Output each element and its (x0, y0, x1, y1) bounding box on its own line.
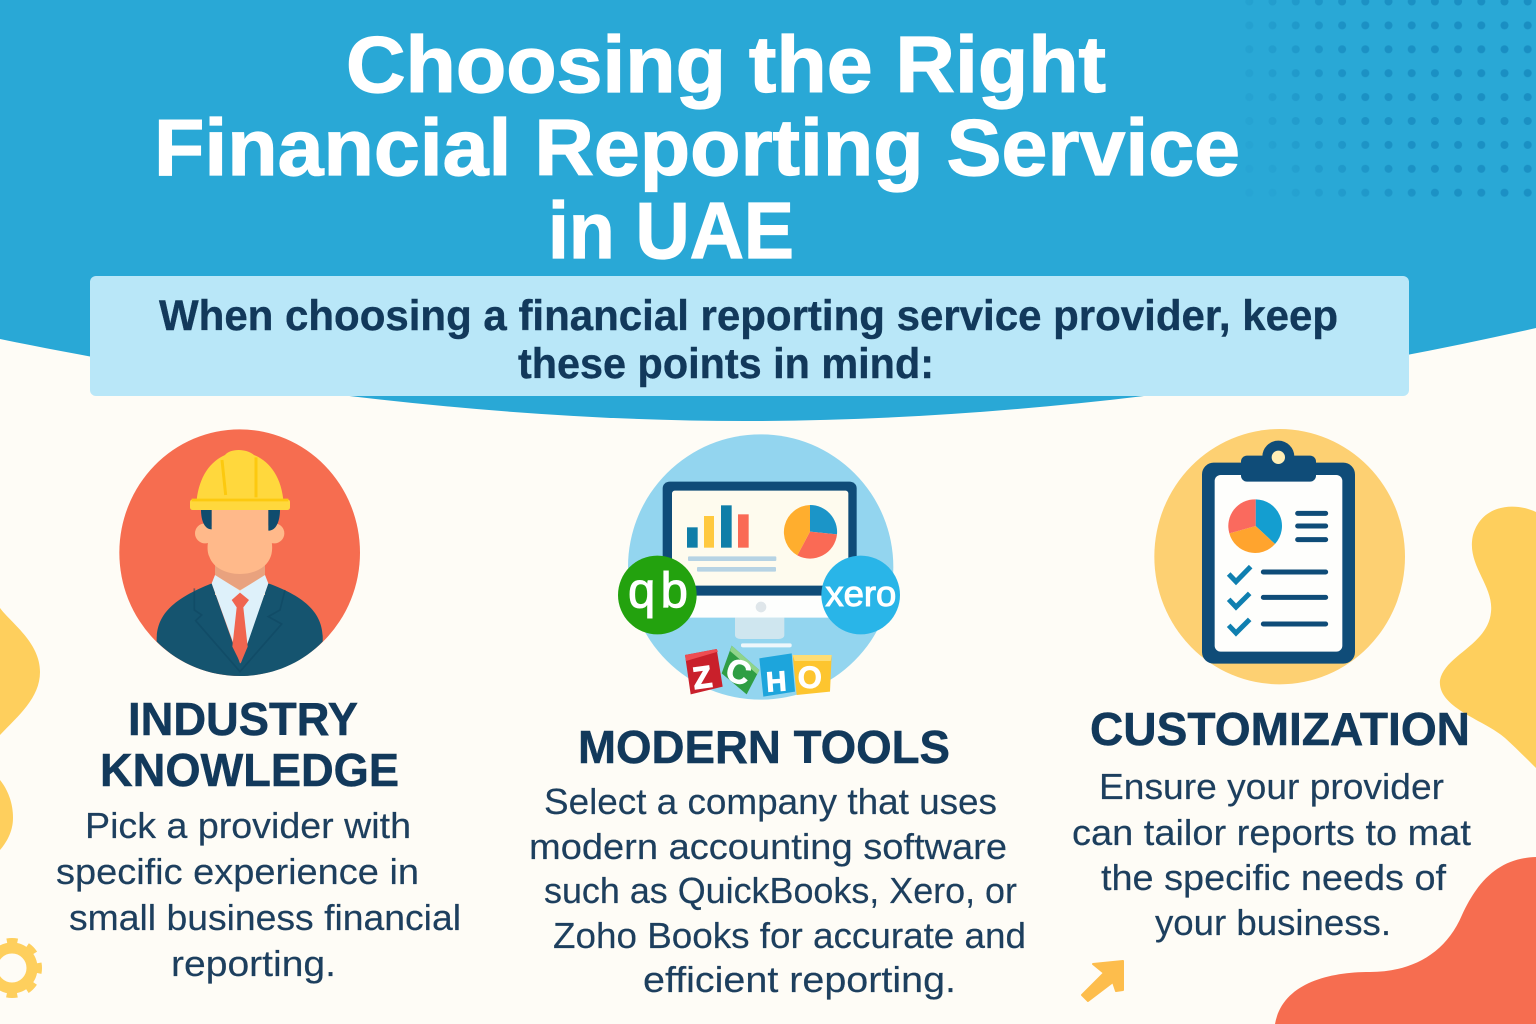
icon: zoho logo: H (765, 665, 787, 698)
body text: Ensure your provider (1099, 766, 1444, 807)
icon: zoho logo (685, 646, 832, 698)
decorative coral blob bottom right (1275, 857, 1536, 1024)
icon: xero logo: xero (825, 573, 896, 614)
panel: industry knowledge (56, 429, 461, 984)
panel: customization (1072, 429, 1471, 943)
body text: the specific needs of (1101, 857, 1447, 898)
body text: can tailor reports to mat (1072, 812, 1471, 853)
icon: zoho logo: Z (691, 660, 714, 696)
body text: efficient reporting. (643, 959, 956, 1000)
heading: CUSTOMIZATION (1090, 703, 1470, 755)
title: Financial Reporting Service (154, 103, 1240, 192)
body text: such as QuickBooks, Xero, or (544, 870, 1017, 911)
header blue curved band (0, 0, 1536, 421)
body text: Zoho Books for accurate and (553, 915, 1026, 956)
icon: zoho logo: O (798, 660, 822, 695)
icon: clipboard checklist (1154, 429, 1405, 684)
panel: modern tools (529, 434, 1026, 1000)
heading (100, 693, 399, 796)
icon: gear (0, 940, 40, 996)
body text (529, 781, 1026, 1000)
body text: small business financial (69, 897, 461, 938)
decorative yellow blob left lower (0, 780, 13, 850)
icon: qb logo: b (661, 563, 688, 619)
icon: arrow (1082, 961, 1123, 1001)
body text: Select a company that uses (544, 781, 997, 822)
body text (1072, 766, 1471, 943)
subtitle banner: When choosing a financial reporting service provider, keep (159, 292, 1338, 340)
body text (56, 805, 461, 984)
body text: modern accounting software (529, 826, 1007, 867)
icon: engineer in hard hat (119, 429, 360, 676)
subtitle banner: these points in mind: (518, 340, 934, 388)
body text: your business. (1155, 902, 1391, 943)
decorative yellow blob left upper (0, 608, 40, 735)
icon: zoho logo: C (721, 651, 756, 694)
title: in UAE (548, 186, 794, 275)
icon: monitor with software logos (618, 434, 900, 700)
body text: reporting. (171, 943, 336, 984)
heading: INDUSTRY (128, 693, 358, 745)
subtitle banner (90, 276, 1409, 396)
icon: qb logo: q (628, 563, 655, 619)
icon: qb logo (618, 556, 697, 634)
heading: MODERN TOOLS (578, 721, 950, 773)
title (154, 20, 1240, 275)
halftone dots pattern (1268, 0, 1532, 197)
title: Choosing the Right (346, 20, 1106, 109)
icon: xero logo (821, 556, 900, 634)
decorative yellow blob right (1440, 507, 1536, 768)
body text: Pick a provider with (85, 805, 411, 846)
heading: KNOWLEDGE (100, 744, 399, 796)
body text: specific experience in (56, 851, 419, 892)
